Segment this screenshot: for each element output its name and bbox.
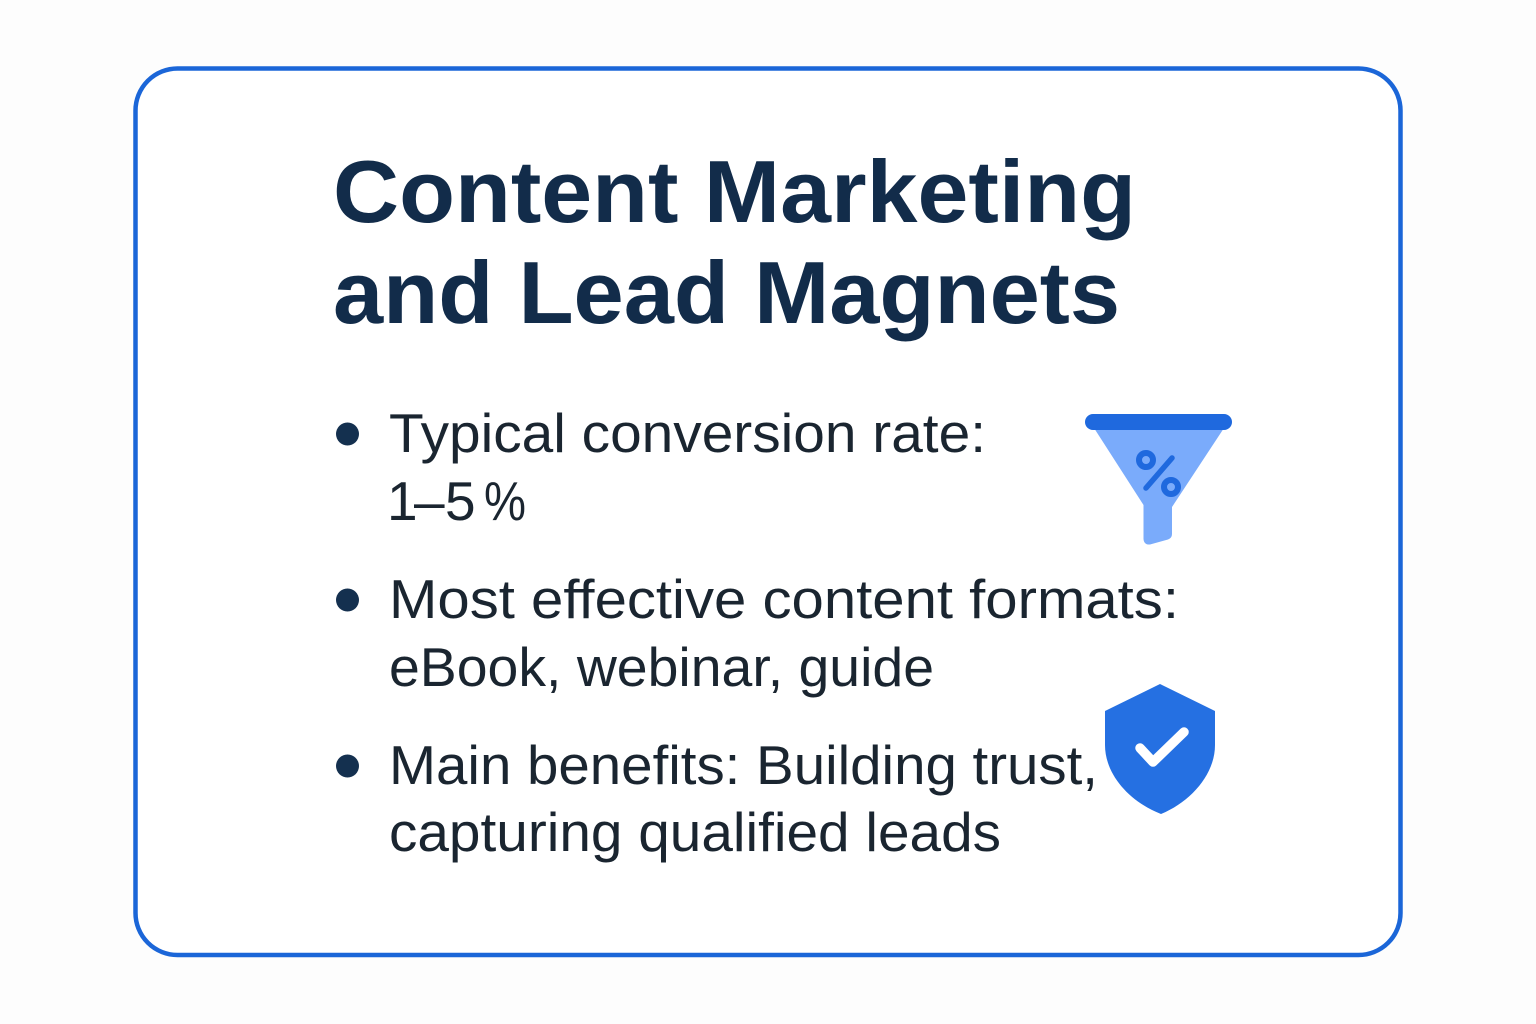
bullet: content formats [336,568,1179,698]
bullet: main benefits [336,734,1098,863]
title: Content Marketing [333,142,1136,241]
bullet: content formats: Most effective content formats: [389,568,1179,630]
bullet: main benefits: Main benefits: Building trust, [389,734,1098,796]
bullet: conversion rate: 1–5 [387,470,476,532]
panel: card [136,68,1400,955]
bullet: conversion rate [336,402,986,532]
bullet: conversion rate: Typical conversion rate: [389,402,986,464]
icon: funnel with percent [1085,414,1232,545]
title: and Lead Magnets [333,243,1120,342]
icon: shield with check [1105,684,1215,814]
title [333,142,1136,342]
bullet: main benefits: capturing qualified leads [389,801,1001,863]
bullet: conversion rate: % [484,470,526,532]
bullet: content formats: eBook, webinar, guide [389,636,934,698]
